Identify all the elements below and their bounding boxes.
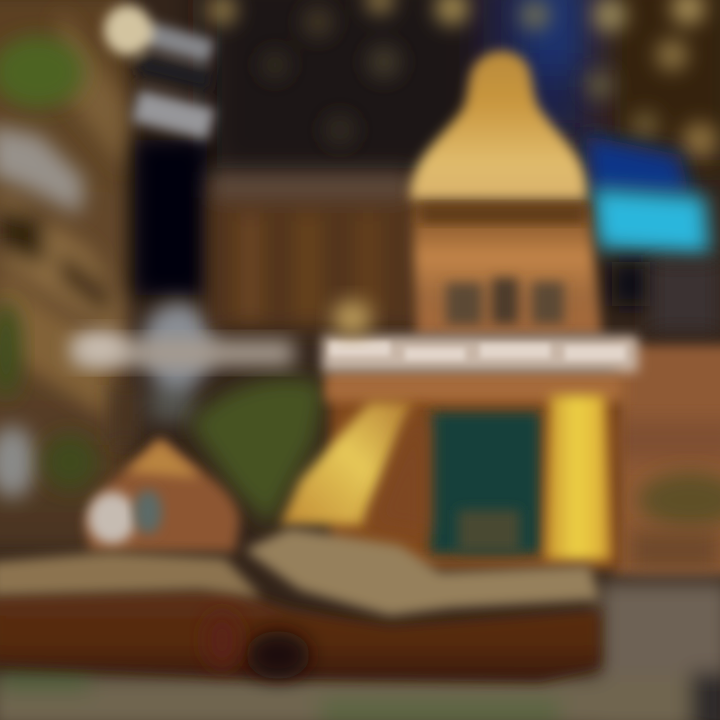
facade: lower-left pale patch [0,426,36,498]
wing shadow [368,415,428,535]
book left page [0,552,262,598]
foliage: top-left green [0,36,84,108]
open book [0,528,600,682]
night sky with gold lights [205,0,720,180]
domed building [410,51,602,335]
building: right brown wall [615,345,720,575]
left yellow wing [280,402,412,525]
book right page [245,528,600,616]
building: left brown tower [0,0,128,550]
door lower panel [458,510,520,552]
book side [0,590,600,682]
gatehouse body [330,372,620,570]
white banner [72,300,638,372]
blue sign [585,135,720,332]
drum of dome [412,200,602,335]
small dome [85,438,240,552]
gatehouse [280,372,625,570]
dark spine [246,631,310,679]
balcony: grey-white band [0,125,85,215]
column: black and white tower [104,5,215,445]
right yellow column [545,395,612,560]
windows in drum [446,278,564,325]
dome base band [420,205,585,223]
foliage: small green bush [42,434,98,490]
lintel [325,374,625,402]
teal door [430,412,540,554]
golden dome [410,51,587,200]
ground: pale paving [0,582,720,720]
building: central brown facade [208,172,420,330]
foliage: right green [638,472,720,528]
foliage: central green tree [190,379,325,525]
red accent [204,612,240,668]
foliage: left edge green [0,302,22,398]
